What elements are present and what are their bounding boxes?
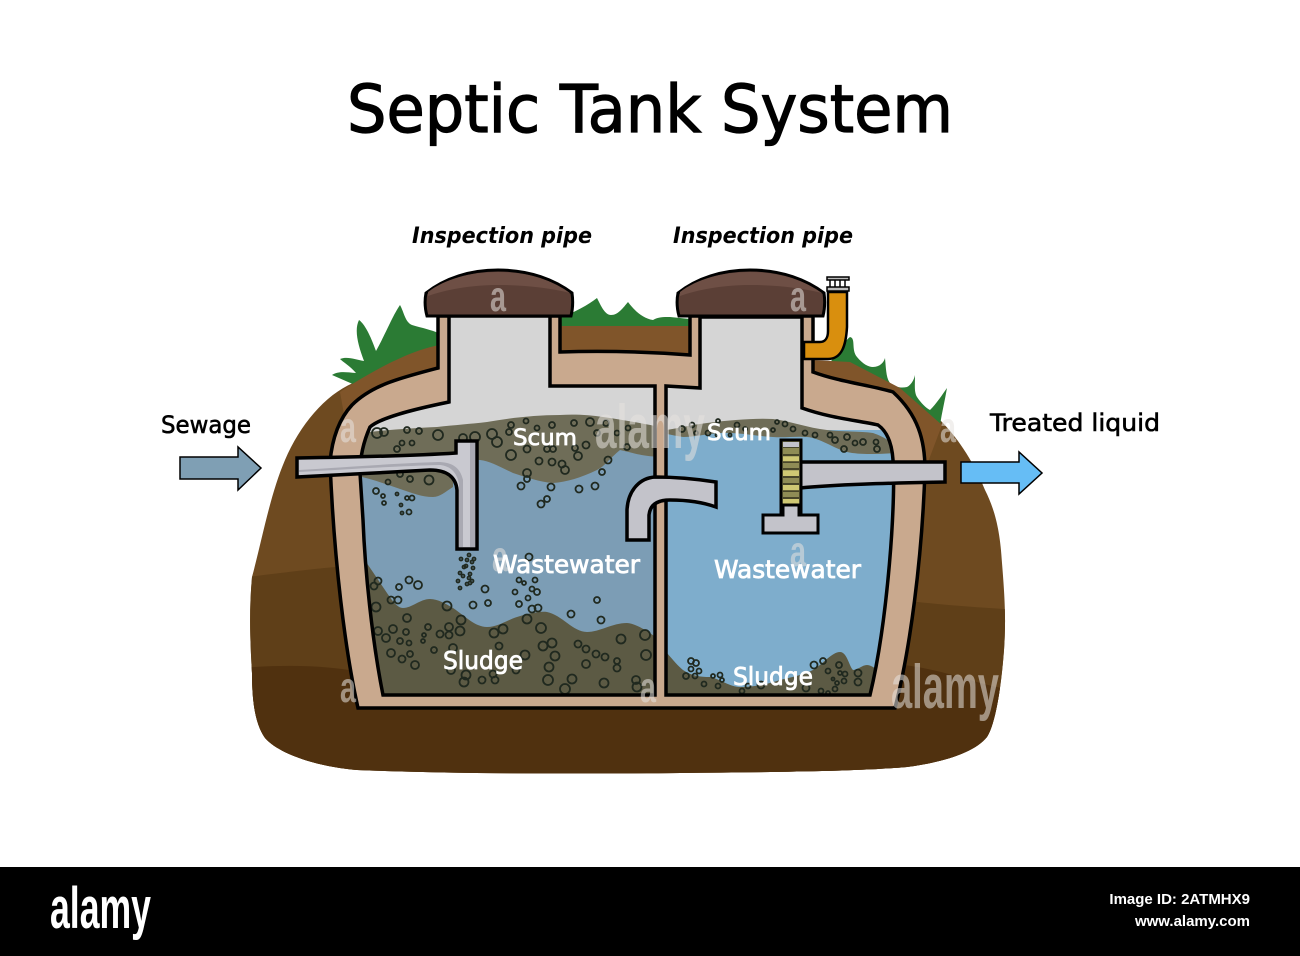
label: sludge left: Sludge (443, 646, 523, 675)
label: scum right: Scum (707, 421, 771, 446)
label: inspection pipe left: Inspection pipe (412, 224, 592, 249)
watermarks: a (790, 273, 807, 321)
soil: between risers (560, 326, 690, 354)
grass: middle (560, 298, 690, 330)
ground: soil mound (240, 370, 1020, 780)
watermarks: a (790, 528, 807, 576)
arrow: treated liquid outflow (961, 452, 1042, 494)
pipe: middle transfer (627, 477, 716, 540)
soil: top right bank (813, 360, 942, 470)
left chamber (350, 310, 660, 710)
sludge layer left (367, 564, 654, 694)
scum layer right (660, 419, 895, 454)
watermarks: a (492, 533, 509, 581)
watermarks: a (340, 404, 357, 452)
title: Septic Tank System (347, 71, 953, 148)
label: wastewater right: Wastewater (714, 555, 862, 584)
tank wall (330, 316, 925, 708)
lid highlight (428, 272, 570, 296)
wastewater right (668, 430, 892, 687)
watermarks: a (490, 273, 507, 321)
wastewater left (362, 450, 654, 636)
filter stripes (783, 447, 799, 505)
filter foot (763, 505, 818, 533)
scum layer left (360, 415, 660, 497)
grass: right bank (830, 337, 947, 425)
air space right (668, 318, 881, 430)
footer url: www.alamy.com (1134, 913, 1250, 930)
watermarks: alamy (891, 653, 999, 722)
right chamber (660, 310, 900, 710)
label: wastewater left: Wastewater (493, 550, 641, 579)
footer image id: Image ID: 2ATMHX9 (1109, 891, 1250, 908)
watermarks (340, 273, 999, 722)
inlet tee shading (299, 443, 475, 547)
watermarks: a (640, 664, 657, 712)
vent cap (827, 277, 849, 291)
footer bar (0, 867, 1300, 956)
filter light bands (783, 456, 799, 504)
bubbles right (679, 419, 880, 695)
label: sewage: Sewage (161, 411, 251, 439)
pipe: inlet tee (297, 441, 477, 549)
watermarks: a (940, 404, 957, 452)
air space left (370, 318, 654, 432)
bubbles left (370, 418, 651, 694)
vent pipe (804, 277, 849, 359)
label: treated liquid: Treated liquid (989, 409, 1160, 437)
watermarks: a (340, 664, 357, 712)
filter column (781, 440, 801, 514)
sludge layer right (668, 652, 874, 694)
arrow: sewage inflow (180, 447, 261, 490)
watermarks: alamy (595, 393, 705, 462)
soil: top left bank (340, 345, 440, 420)
footer logo: alamy (50, 876, 151, 941)
lid: right inspection cover (677, 270, 825, 316)
label: scum left: Scum (513, 426, 577, 451)
lid: left inspection cover (425, 270, 573, 316)
lid highlight (680, 272, 822, 296)
grass: left bank (332, 305, 438, 385)
filter cap (783, 442, 799, 447)
pipe: outlet with filter (763, 440, 945, 533)
label: sludge right: Sludge (733, 662, 813, 691)
label: inspection pipe right: Inspection pipe (673, 224, 853, 249)
